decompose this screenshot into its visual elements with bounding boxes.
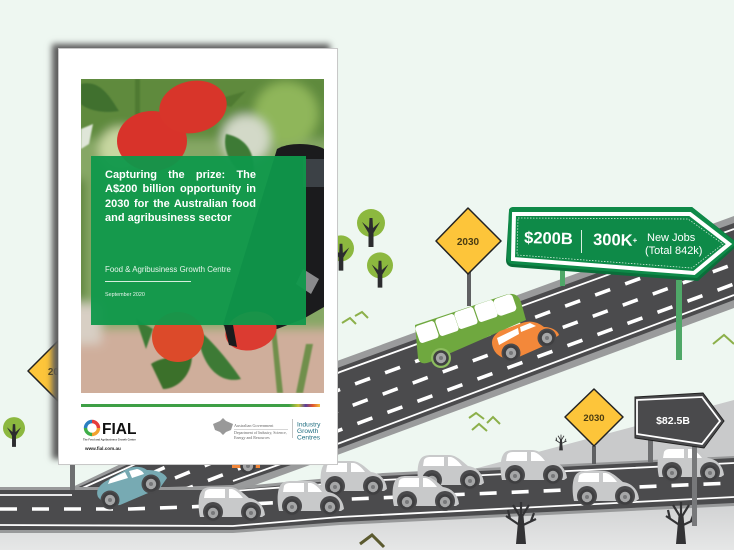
divider	[581, 230, 582, 253]
trees	[3, 209, 567, 450]
report cover page	[59, 49, 337, 464]
report title: 2030 for the Australian food	[105, 198, 256, 210]
FIAL logo: www.fial.com.au	[84, 446, 121, 451]
upper road	[62, 216, 734, 492]
green sign post right	[676, 280, 682, 360]
Australian Government logo: Australian Government	[234, 423, 274, 428]
grey hill	[470, 400, 734, 550]
yellow sign: 2030 lower: 2030	[583, 413, 605, 424]
yellow sign: 2030 lower	[565, 389, 623, 446]
green sign post left	[560, 268, 565, 286]
leaves	[81, 79, 313, 393]
Industry Growth Centres logo	[297, 422, 321, 442]
green title panel	[91, 156, 306, 325]
yellow sign: 2030 upper: 2030	[457, 237, 480, 248]
blurred background	[81, 79, 324, 393]
grey cars	[199, 447, 724, 522]
sign caption: new jobs: New Jobs	[647, 232, 696, 244]
dark chevron	[360, 535, 384, 547]
sign value: 300K+: +	[632, 236, 638, 245]
orange car	[492, 322, 559, 362]
FIAL logo	[83, 421, 136, 451]
FIAL logo: FIAL	[102, 421, 136, 438]
yellow sign: 2030 left	[28, 340, 90, 402]
bare trees	[506, 502, 696, 544]
Australian Government logo: Department of Industry, Science,	[234, 430, 287, 436]
report title	[105, 169, 256, 224]
yellow sign post	[467, 272, 471, 306]
sign value: 300K+: 300K	[593, 231, 633, 250]
green bus	[415, 293, 526, 368]
report title: and agribusiness sector	[105, 212, 232, 224]
sign caption: new jobs	[645, 232, 702, 257]
gripper tip	[224, 325, 237, 347]
sign value: $200B: $200B	[524, 229, 573, 248]
Industry Growth Centres logo: Growth	[297, 428, 319, 435]
green highway sign	[506, 207, 734, 281]
yellow sign post lower	[592, 446, 596, 464]
orange car peeking	[232, 458, 260, 474]
yellow sign: 2030 left: 2030	[48, 367, 71, 378]
report title: Capturing the prize: The	[105, 169, 256, 181]
Industry Growth Centres logo: Centres	[297, 434, 321, 442]
lower road	[0, 456, 734, 533]
yellow sign: 2030 upper	[436, 208, 501, 274]
post: dark sign right	[692, 446, 697, 526]
cover photo: tomatoes	[81, 79, 324, 393]
Australian Government logo	[213, 418, 288, 440]
teal car	[97, 467, 167, 510]
Industry Growth Centres logo: Industry	[297, 422, 321, 428]
green chevrons	[342, 312, 734, 431]
post: dark sign left	[648, 440, 653, 462]
post: left sign	[70, 462, 75, 490]
sign caption: new jobs: (Total 842k)	[645, 245, 702, 257]
organisation: Food & Agribusiness Growth Centre	[105, 265, 231, 274]
FIAL logo: The Food and Agribusiness Growth Centre	[83, 438, 136, 442]
ground below road	[0, 500, 734, 550]
dark sign: $82.5B	[635, 393, 724, 448]
robot arm	[223, 144, 324, 331]
Australian Government logo: Energy and Resources	[234, 435, 270, 440]
report title: A$200 billion opportunity in	[105, 183, 256, 195]
rainbow divider	[81, 404, 320, 407]
tomatoes	[117, 111, 187, 171]
date: September 2020	[105, 292, 145, 298]
dark sign: $82.5B: $82.5B	[656, 415, 690, 427]
cover footer: logos	[81, 404, 321, 451]
